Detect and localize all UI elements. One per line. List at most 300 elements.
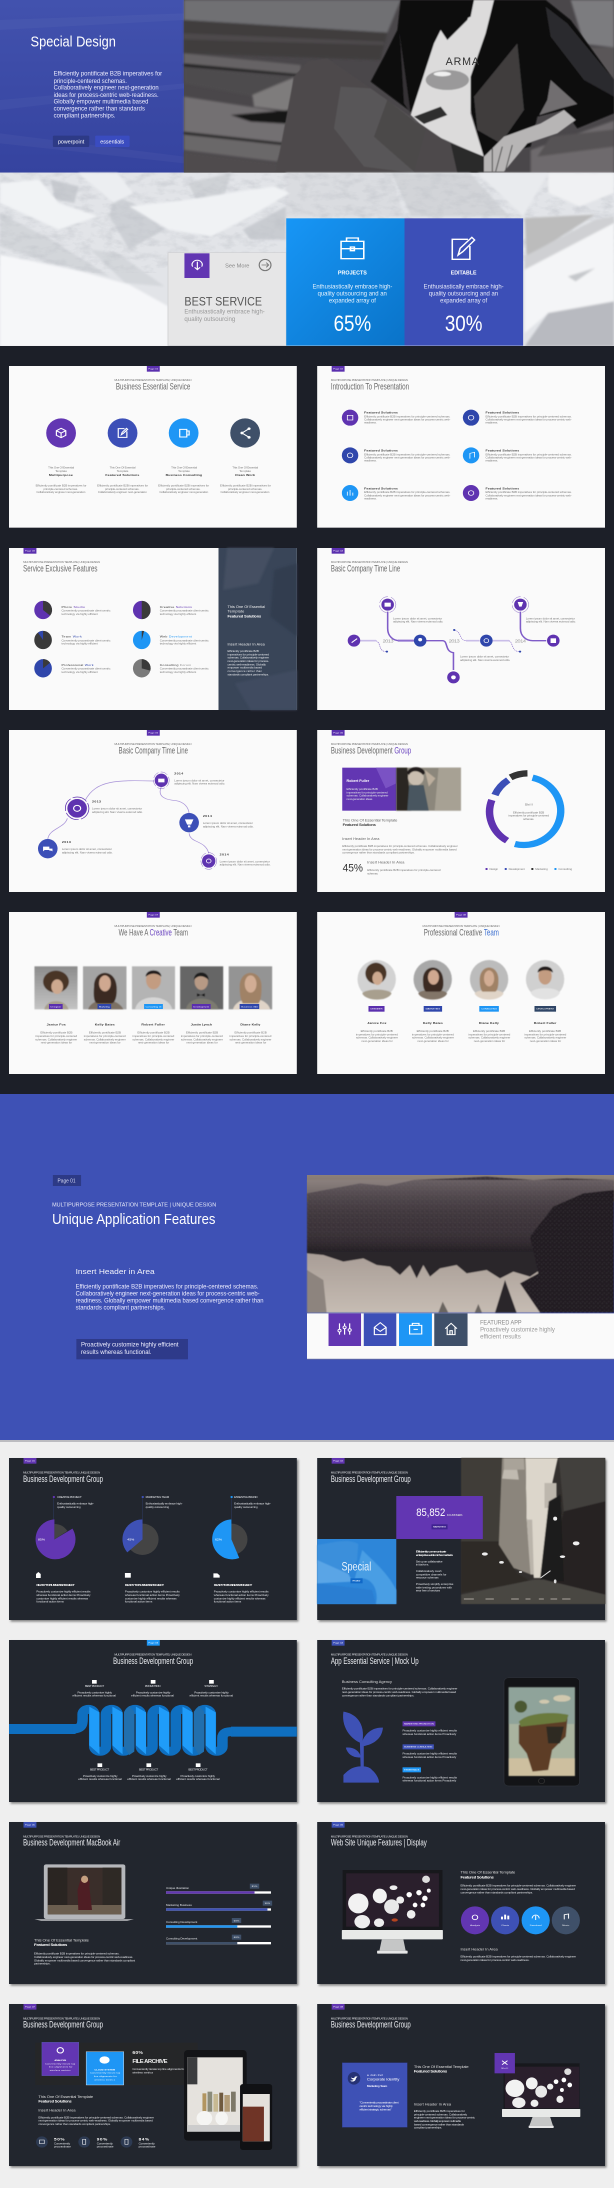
top captions: PROMOTION [145, 1684, 161, 1688]
stat: 45%: schemas. [367, 872, 379, 875]
pie chart text: Conveniently procrastinate client-centric [61, 667, 111, 671]
round portrait: Diane Kelly [470, 960, 508, 1000]
text block: Featured Solutions [38, 2100, 72, 2104]
slide: basic company time line curved: Basic Company Time Line [119, 746, 188, 756]
column captions: customize highly efficient results whereas [125, 1597, 177, 1600]
slide: ribbon infographic: Page 03 [148, 1642, 159, 1645]
team photo: Justin Lynch: Development [193, 1005, 209, 1008]
timeline nodes [38, 772, 217, 869]
timeline captions: adipiscing elit. Nam viverra euismod odio. [393, 620, 444, 624]
blue image block: special: Special [341, 1560, 371, 1573]
slide: ribbon infographic [9, 1640, 297, 1802]
stat: 45%: 45% [343, 861, 363, 874]
names and bios: Efficiently pontificate B2B [417, 1029, 449, 1033]
small stats: 50% [54, 2137, 65, 2141]
sub heading: Insert Header in Area [76, 1267, 155, 1276]
slide: web site unique features display: Web Site Unique Features | Display [331, 1838, 427, 1848]
slide row 3 and 4 [9, 730, 605, 1074]
column captions: whereas functional action items Proactively [125, 1593, 180, 1597]
text block [38, 2095, 154, 2126]
slide: business development group donut [317, 730, 605, 892]
text block: Collaboratively mesh [416, 1569, 442, 1573]
text block: Featured Solutions [34, 1943, 67, 1947]
label tags: whereas functional action items Proactively [403, 1755, 457, 1759]
panel: best service with mountain background [0, 173, 614, 346]
year labels [383, 639, 526, 644]
side panel with forest texture: centric web-readiness. Globally [228, 663, 267, 666]
side panel with forest texture: Template [228, 610, 244, 614]
year labels: 2013 [449, 639, 460, 644]
timeline captions: Lorem ipsum dolor sit amet, consectetur [393, 617, 442, 620]
hero paragraph: Efficiently pontificate B2B imperatives for [54, 71, 163, 77]
feature circles: Download [530, 1924, 542, 1927]
text block: Insert Header In Area [414, 2103, 452, 2106]
slide: web site unique features display [317, 1822, 605, 1984]
chart legend [486, 867, 573, 871]
feature text grid: Collaboratively engineer next-generation ideas for process-centric web- [364, 456, 450, 460]
icon: briefcase [341, 238, 364, 259]
timeline captions: adipiscing elit. Nam viverra euismod odio. [220, 863, 271, 867]
small stats [36, 2136, 156, 2149]
timeline captions [62, 772, 271, 867]
slide row 7 and 8 [9, 1822, 605, 2166]
slide: introduction to presentation [317, 366, 605, 528]
names and bios: next-generation ideas for [417, 1039, 449, 1043]
role tags: MARKETING [426, 1008, 440, 1011]
text block: Featured Solutions [460, 1876, 494, 1879]
hero paragraph: ideas for process-centric web-readiness. [54, 92, 159, 99]
side panel with forest texture: imperatives for principle-centered [228, 653, 270, 656]
names and bios: imperatives for principle-centered [356, 1033, 398, 1036]
featured app text [480, 1320, 556, 1340]
progress bars: Marketing Business [166, 1903, 193, 1907]
pie chart text: technology via highly efficient [61, 612, 98, 616]
timeline captions: adipiscing elit. Nam viverra euismod odio. [460, 658, 510, 662]
team names and bios [35, 1023, 272, 1045]
progress bars: Consulting Development [166, 1920, 198, 1924]
role tags [368, 1006, 556, 1012]
text block: Collaboratively engineer next-generation ideas for process-centric web-readiness. [34, 1955, 133, 1959]
column labels: Efficiently pontificate B2B imperatives for [97, 484, 148, 488]
blue profile card: centric technology via highly [359, 2104, 393, 2108]
text block: next-generation ideas for process-centric web-readiness. Globally empower multimedia based [460, 1887, 575, 1891]
text block: enterprise-wide niche markets [416, 1553, 453, 1557]
pie chart text: Conveniently procrastinate client-centric [160, 609, 209, 613]
progress bars: Unique illustration [166, 1886, 190, 1890]
feature text grid: Collaboratively engineer next-generation ideas for process-centric web- [486, 418, 572, 422]
slide: business essential service: Business Essential Service [116, 382, 191, 392]
slide: file archive devices [9, 2004, 297, 2166]
names and bios: next-generation ideas for [361, 1039, 393, 1043]
paragraph [76, 1284, 264, 1311]
profile card: imperatives for principle-centered [347, 791, 388, 794]
timeline connectors [360, 612, 546, 670]
text block [416, 1550, 454, 1592]
slide: macbook air: Business Development MacBook Air [23, 1838, 121, 1848]
slide: introduction to presentation: MULTIPURPOSE PRESENTATION TEMPLATE | UNIQUE DESIGN [331, 378, 408, 382]
text block: This One Of Essential Template [460, 1871, 515, 1875]
text block: Efficiently pontificate B2B imperatives for [414, 2109, 465, 2113]
slide: service exclusive features [9, 548, 297, 710]
pie chart 45%: 45% [127, 1538, 134, 1542]
pie charts [34, 601, 151, 677]
feature text grid: Collaboratively engineer next-generation ideas for process-centric web- [486, 456, 572, 460]
column labels: principle-centered schemas. [43, 487, 78, 491]
donut chart [490, 773, 561, 845]
feature text grid: Efficiently pontificate B2B imperatives for principle-centered schemas. [364, 490, 451, 494]
slide: basic company time line curved [9, 730, 297, 892]
progress bars: 98% [265, 1902, 271, 1905]
timeline captions: adipiscing elit. Nam viverra euismod odio. [174, 782, 225, 786]
team photo: Justin Lynch [180, 966, 223, 1009]
names and bios: Robert Fuller [534, 1021, 557, 1025]
text block [34, 1939, 135, 1965]
column captions: customize highly efficient results whereas [214, 1597, 266, 1600]
app card [307, 1313, 614, 1360]
hero paragraph: compliant partnerships. [54, 113, 116, 119]
names and bios: imperatives for principle-centered [524, 1033, 567, 1036]
column labels: Template [117, 469, 129, 473]
side panel with forest texture: schemas. Collaboratively engineer [228, 656, 269, 660]
slide: basic company time line horizontal: Page 04 [333, 550, 344, 553]
text block: Efficiently pontificate B2B imperatives for principle-centered schemas. Collaboratively engineer [38, 2116, 154, 2119]
tablet and phone mock up [184, 2050, 272, 2150]
slide: ribbon infographic: MULTIPURPOSE PRESENTATION TEMPLATE | UNIQUE DESIGN [114, 1653, 192, 1656]
slide: dark pie charts [9, 1458, 297, 1620]
team photo: Robert Fuller: Consulting Ui [146, 1005, 162, 1008]
slide: web site unique features display: MULTIPURPOSE PRESENTATION TEMPLATE | UNIQUE DESIGN [331, 1835, 408, 1838]
text block: This One Of Essential Template [38, 2095, 93, 2099]
text block: Insert Header In Area [38, 2109, 77, 2113]
slide: file archive devices: Page 07 [25, 2006, 36, 2009]
blue profile card: efficient strategic schemas" [359, 2108, 392, 2111]
timeline captions: adipiscing elit. Nam viverra euismod odio. [526, 620, 576, 624]
pie chart text: technology via highly efficient [61, 670, 98, 674]
page tag [53, 1175, 81, 1186]
text block: Globally empower multimedia based convergence rather than standards compliant [34, 1959, 135, 1962]
slide: file archive devices: Business Development Group [23, 2020, 103, 2030]
team names and bios: Diane Kelly [240, 1023, 261, 1027]
side panel with forest texture: Insert Header In Area [228, 643, 265, 646]
team names and bios: Efficiently pontificate B2B [40, 1031, 73, 1035]
projects text: expanded array of [329, 298, 376, 304]
text block: compliant partnerships. [414, 2126, 442, 2130]
slide: basic company time line horizontal: MULTIPURPOSE PRESENTATION TEMPLATE | UNIQUE DESIGN [331, 560, 408, 564]
tile: briefcase [399, 1313, 432, 1346]
timeline captions: Lorem ipsum dolor sit amet, consectetur [92, 807, 142, 811]
file archive stat: FILE ARCHIVE [132, 2059, 168, 2065]
pie chart text [61, 605, 209, 674]
blue image block: special: PROJECT [352, 1580, 361, 1583]
file archive stat [132, 2050, 185, 2074]
card: analysis [42, 2042, 79, 2076]
slide: dark pie charts: MULTIPURPOSE PRESENTATION TEMPLATE | UNIQUE DESIGN [23, 1471, 100, 1474]
column labels: Featured Solutions [105, 473, 140, 477]
panel: hero special design [0, 0, 614, 173]
column labels: Collaboratively engineer next-generation [220, 490, 270, 494]
label tags: whereas functional action items Proactively [403, 1732, 457, 1736]
slide: service exclusive features: MULTIPURPOSE PRESENTATION TEMPLATE | UNIQUE DESIGN [23, 560, 100, 564]
team names and bios: Efficiently pontificate B2B [186, 1031, 218, 1035]
editable text: Enthusiastically embrace high- [424, 284, 504, 290]
pie chart 45%: Enthusiastically embrace high- [146, 1502, 183, 1505]
featured app text: FEATURED APP [480, 1320, 522, 1326]
column captions: Proactively customize highly efficient results [125, 1590, 180, 1594]
side panel with forest texture: Efficiently pontificate B2B [228, 649, 259, 653]
text block: competitive channels for [416, 1573, 447, 1576]
pie chart text: Photo Studio [61, 605, 85, 609]
side panel with forest texture [219, 548, 297, 710]
column labels: Collaboratively engineer next-generation [159, 490, 209, 494]
side panel with forest texture: empower multimedia based [228, 666, 262, 670]
bottom captions: Proactively customize highly [181, 1774, 216, 1778]
tile: envelope [364, 1313, 396, 1346]
column labels: Template [239, 469, 252, 473]
slide: professional creative team: MULTIPURPOSE PRESENTATION TEMPLATE | UNIQUE DESIGN [423, 924, 500, 928]
text block: partnerships. [34, 1962, 51, 1965]
blue profile card: a Join Ind [367, 2073, 383, 2077]
hero paragraph: Collaboratively engineer next-generation [54, 85, 159, 91]
bottom captions: efficient results whereas functional [127, 1777, 171, 1781]
timeline captions: Lorem ipsum dolor sit amet, consectetur [460, 655, 509, 659]
names and bios: Efficiently pontificate B2B [473, 1029, 505, 1033]
small stats: Conveniently [97, 2142, 113, 2145]
card: analysis: Conveniently iterate top [45, 2062, 76, 2065]
timeline captions: 2014 [220, 853, 229, 856]
paragraph: Efficiently pontificate B2B imperatives for principle-centered schemas. [76, 1284, 259, 1290]
slide: basic company time line curved: MULTIPURPOSE PRESENTATION TEMPLATE | UNIQUE DESIGN [114, 742, 192, 746]
timeline captions [393, 617, 576, 662]
profile card: next-generation ideas [347, 797, 373, 801]
pie chart 45%: quality outsourcing [146, 1505, 170, 1509]
column captions: Proactively customize highly efficient results [214, 1590, 269, 1594]
slide: dark city stats [317, 1458, 605, 1620]
profile card [342, 767, 461, 811]
intro text: convergence rather than standards compliant partnerships. [342, 1694, 415, 1697]
text block: convergence rather than standards compliant partnerships. [342, 851, 415, 855]
top captions: Proactively customize highly [78, 1691, 113, 1694]
card: analysis: line alignments for [49, 2066, 73, 2069]
icon: plant [343, 1712, 383, 1783]
file archive stat: wireless metrics [132, 2071, 154, 2074]
progress bars: 68% [234, 1936, 240, 1939]
slide: business essential service: Page 01 [148, 368, 159, 371]
heading: special design: Special Design [31, 34, 116, 50]
text block: This One Of Essential Template [414, 2065, 469, 2069]
purple badge: Skill [501, 2067, 509, 2070]
pie chart 85%: Enthusiastically embrace high- [57, 1502, 94, 1505]
label tags: MARKETING PROMOTION [404, 1723, 434, 1726]
column labels: Multipurpose [49, 473, 73, 477]
slide: business development group donut: Page 06 [333, 732, 344, 735]
pie chart 62% [212, 1495, 271, 1559]
text block 2: Efficiently pontificate B2B imperatives for principle-centered schemas. Collaboratively engineer [460, 1955, 576, 1959]
profile card: Efficiently pontificate B2B [347, 787, 378, 791]
column captions: whereas functional action items Proactively [214, 1593, 269, 1597]
tag: powerpoint: powerpoint [58, 139, 84, 145]
slide: corporate identity: Business Development Group [331, 2020, 411, 2030]
top captions: Proactively customize highly [136, 1691, 171, 1694]
round portrait: Robert Fuller [526, 960, 564, 999]
column labels: Efficiently pontificate B2B imperatives for [158, 484, 209, 488]
pie chart text: technology via highly efficient [160, 612, 196, 616]
progress bars: 68% [234, 1919, 240, 1922]
column labels: Clean Work [235, 473, 255, 477]
column captions: READY TO BUSINESS PROJECT [125, 1583, 164, 1587]
best service text: Enthusiastically embrace high- [184, 309, 265, 315]
pie chart text: technology via highly efficient [61, 642, 98, 646]
tile: sliders [329, 1313, 361, 1346]
year labels: 2013 [383, 639, 394, 644]
timeline captions: adipiscing elit. Nam viverra euismod odio. [203, 825, 254, 828]
slide: service exclusive features: Service Exclusive Features [23, 564, 98, 574]
column labels: This One Of Essential [171, 466, 197, 470]
feature text grid: readiness. [364, 497, 377, 500]
names and bios: Kelly Bates [423, 1021, 443, 1025]
team names and bios: schemas. Collaboratively engineer [181, 1038, 223, 1041]
timeline nodes [348, 597, 560, 683]
feature text grid: Featured Solutions [486, 449, 519, 453]
text block: Efficiently pontificate B2B imperatives for principle-centered schemas. Collaboratively engineer [342, 844, 458, 848]
timeline captions: adipiscing elit. Nam viverra euismod odio. [62, 851, 113, 854]
card: cloud system: Conveniently iterate top [90, 2072, 121, 2075]
desktop monitor mock up [342, 1870, 443, 1954]
slide: app essential service mock up: App Essential Service | Mock Up [331, 1657, 419, 1667]
hero blue text panel [0, 0, 184, 173]
slide: business essential service: MULTIPURPOSE PRESENTATION TEMPLATE | UNIQUE DESIGN [114, 378, 192, 382]
slide: we have a creative team: MULTIPURPOSE PRESENTATION TEMPLATE | UNIQUE DESIGN [114, 924, 192, 928]
slide: we have a creative team [9, 912, 297, 1074]
names and bios: next-generation ideas for [530, 1039, 561, 1043]
text block: Featured Solutions [414, 2070, 447, 2074]
feature text grid: Efficiently pontificate B2B imperatives for principle-centered schemas. [486, 453, 572, 456]
names and bios: Efficiently pontificate B2B [361, 1029, 393, 1033]
stat block 85,852: MARKETING [433, 1526, 446, 1529]
team names and bios: next-generation ideas for [235, 1041, 266, 1045]
text block: convergence rather than standards compliant partnerships. [38, 2122, 111, 2126]
team photo: Janice Fox [34, 966, 78, 1009]
round portrait: Kelly Bates [414, 960, 452, 1000]
slide: professional creative team: Professional Creative Team [424, 928, 499, 938]
slide: app essential service mock up: Page 04 [333, 1642, 344, 1645]
slide: business development group donut: MULTIPURPOSE PRESENTATION TEMPLATE | UNIQUE DESIGN [331, 742, 408, 746]
slide: introduction to presentation: Introduction To Presentation [331, 382, 409, 392]
pie chart text: Conveniently procrastinate client-centric [160, 639, 209, 642]
feature circles [461, 1906, 580, 1934]
pie chart text: technology via highly efficient [160, 670, 196, 674]
pie chart 45%: MARKETING TEAM [146, 1495, 170, 1499]
hero paragraph: convergence rather than standards [54, 106, 145, 112]
hero paragraph: Globally empower multimedia based [54, 99, 149, 105]
column captions: functional action items [36, 1600, 65, 1603]
timeline captions: Lorem ipsum dolor sit amet, consectetur [203, 821, 253, 825]
text block: next-generation ideas for process-centric web-readiness. Globally empower multimedia based [38, 2119, 153, 2123]
slide: basic company time line horizontal: Basic Company Time Line [331, 564, 401, 574]
slide: dark city stats: MULTIPURPOSE PRESENTATION TEMPLATE | UNIQUE DESIGN [331, 1471, 408, 1474]
blue profile card [342, 2063, 407, 2127]
side panel with forest texture: This One Of Essential [228, 605, 265, 609]
feature text grid: readiness. [486, 421, 498, 425]
card: cloud system: line alignments for [94, 2075, 117, 2078]
column labels: Collaboratively engineer next-generation [36, 490, 86, 494]
feature text grid: readiness. [364, 459, 377, 463]
photo: forest lake [307, 1175, 614, 1313]
slide: dark city stats: Business Development Group [331, 1475, 411, 1485]
hero photo: seated woman: ARMA [446, 56, 480, 68]
names and bios: imperatives for principle-centered [412, 1033, 454, 1036]
timeline captions: 2014 [174, 772, 183, 776]
see more link: See More [225, 264, 249, 269]
role tags: DEVELOPMENT [536, 1008, 555, 1011]
slide: macbook air: Page 05 [25, 1824, 36, 1827]
editable text [424, 284, 504, 304]
feature text grid: Collaboratively engineer next-generation ideas for process-centric web- [364, 418, 450, 422]
tag: essentials: essentials [100, 139, 124, 145]
profile card: schemas. Collaboratively engineer [347, 794, 389, 798]
pie chart 62%: ESSENTIAL BRAND [234, 1495, 258, 1499]
team names and bios: next-generation ideas for [89, 1041, 121, 1045]
photo: woman with glasses [396, 767, 461, 811]
card: cloud system: wireless metrics [94, 2078, 116, 2081]
text block 2 [460, 1948, 576, 1962]
team names and bios: imperatives for principle-centered [132, 1034, 175, 1038]
projects text: quality outsourcing and an [318, 291, 387, 297]
icon: cloud download [184, 253, 209, 278]
names and bios: Efficiently pontificate B2B [529, 1029, 561, 1033]
intro text: Efficiently pontificate B2B imperatives for principle-centered schemas. Collaboratively engineer [342, 1687, 457, 1691]
column labels: principle-centered schemas. [105, 487, 140, 491]
feature text grid: Featured Solutions [486, 411, 519, 415]
profile card: Robert Fuller [347, 779, 370, 783]
column labels: Efficiently pontificate B2B imperatives for [220, 484, 271, 488]
feature circles: Analysis [470, 1924, 481, 1927]
slide: dark pie charts: Business Development Group [23, 1475, 103, 1485]
featured app text: Proactively customize highly [480, 1327, 556, 1333]
team photo: Diane Kelly [229, 966, 272, 1009]
top captions: efficient results whereas functional [72, 1694, 116, 1698]
text block: initiatives. [416, 1563, 429, 1567]
feature text grid: Efficiently pontificate B2B imperatives for principle-centered schemas. [364, 453, 451, 456]
label tags: ESSENTIAL B [404, 1769, 420, 1772]
slide: business development group donut: Business Development Group [331, 746, 411, 756]
text block: convergence rather than standards compliant partnerships. [460, 1891, 533, 1894]
column captions: functional action items [214, 1600, 242, 1603]
names and bios: imperatives for principle-centered [468, 1033, 511, 1036]
projects text: Enthusiastically embrace high- [312, 284, 392, 290]
slide: business essential service [9, 366, 297, 528]
role tags: DESIGNER [370, 1008, 383, 1011]
feature text grid [364, 411, 572, 500]
label tags: whereas functional action items Proactively [403, 1779, 457, 1783]
timeline captions: adipiscing elit. Nam viverra euismod odio. [92, 810, 143, 814]
column captions [36, 1572, 269, 1603]
slide: macbook air: MULTIPURPOSE PRESENTATION TEMPLATE | UNIQUE DESIGN [23, 1835, 100, 1838]
slide: dark pie charts: Page 01 [25, 1460, 36, 1463]
column labels: Efficiently pontificate B2B imperatives for [36, 484, 87, 488]
team names and bios: Robert Fuller [141, 1023, 166, 1027]
team photo: Kelly Bates: Marketing [99, 1005, 110, 1008]
text block 2: next-generation ideas for process-centric web-readiness. [460, 1958, 530, 1962]
callout: results whereas functional. [81, 1349, 152, 1356]
slide: file archive devices: MULTIPURPOSE PRESENTATION TEMPLATE | UNIQUE DESIGN [23, 2017, 100, 2020]
names and bios: Janice Fox [367, 1021, 387, 1025]
team names and bios: imperatives for principle-centered [181, 1034, 223, 1038]
donut chart: Efficiently pontificate B2B [513, 811, 544, 814]
bottom captions: Proactively customize highly [132, 1774, 167, 1778]
pie chart text: Team Work [61, 635, 82, 639]
donut chart: schemas. [523, 817, 534, 821]
column labels [36, 466, 271, 494]
